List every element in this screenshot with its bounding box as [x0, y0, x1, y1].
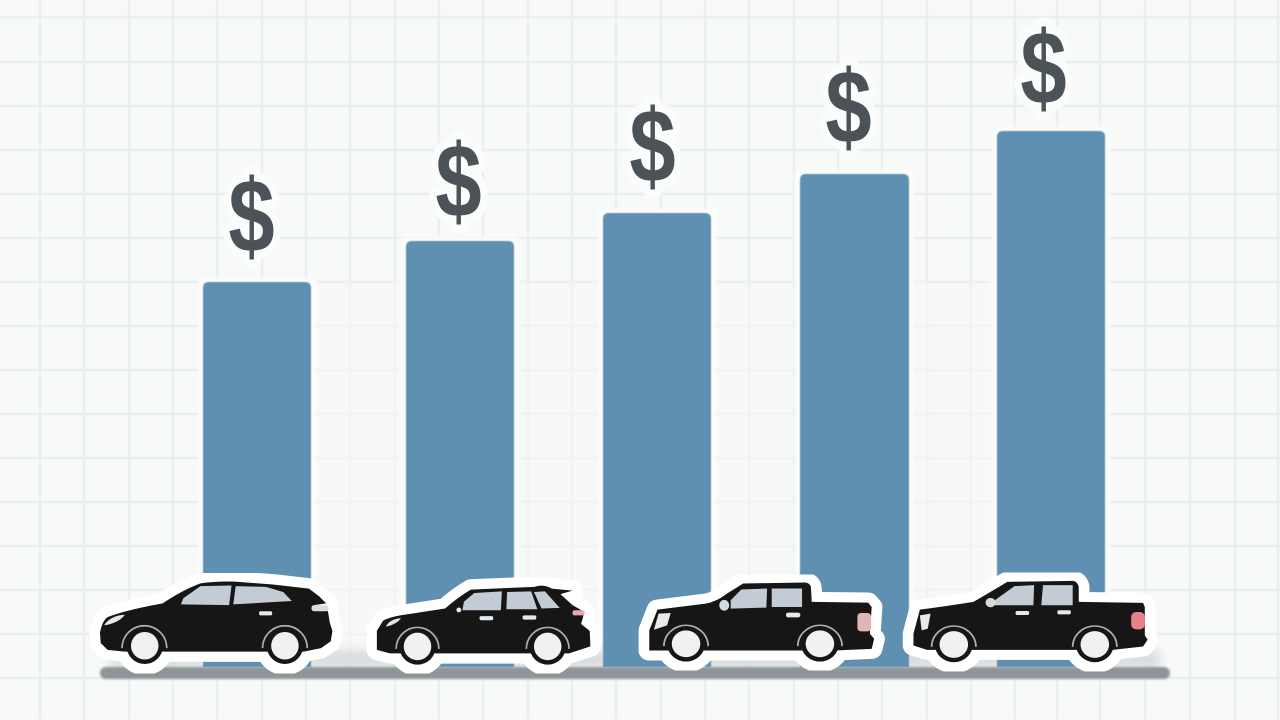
- bar 4: [800, 174, 909, 667]
- dollar 2: $: [435, 123, 482, 239]
- dollar 4: $: [825, 49, 872, 165]
- dollar 3: $: [629, 88, 676, 204]
- baseline: [100, 667, 1170, 679]
- bar 3: [603, 213, 711, 667]
- car 2: SUV: [377, 586, 590, 665]
- dollar signs: [228, 10, 1067, 274]
- bar 5: [997, 131, 1105, 667]
- faded panels between bars: [311, 282, 997, 667]
- car 1: crossover: [100, 582, 332, 665]
- car 3: pickup: [649, 582, 874, 662]
- bar chart: [203, 131, 1105, 667]
- bar halos: [198, 127, 1110, 667]
- dollar 5: $: [1020, 10, 1067, 126]
- bar 2: [406, 241, 514, 667]
- ground shadow: [110, 650, 1160, 668]
- bar 1: [203, 282, 311, 667]
- dollar 1: $: [228, 158, 275, 274]
- car 4: long pickup: [913, 581, 1148, 663]
